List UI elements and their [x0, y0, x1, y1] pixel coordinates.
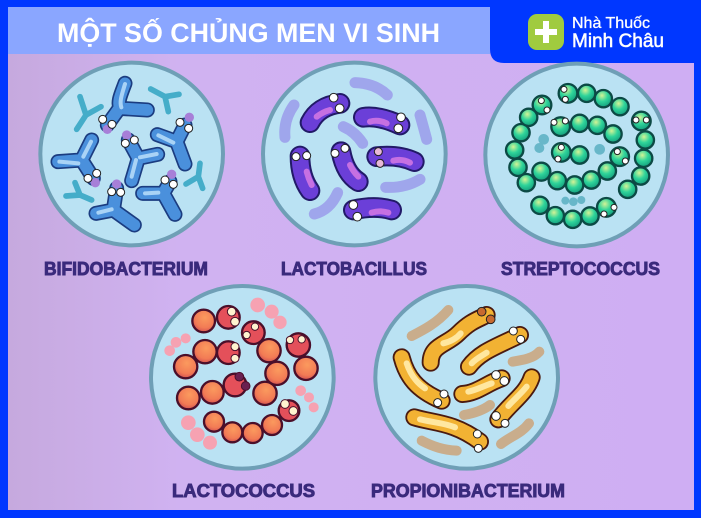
bacteria faces	[84, 113, 194, 196]
logo: Nhà Thuốc Minh Châu: Minh Châu	[572, 31, 664, 52]
panel: Bifidobacterium	[40, 63, 223, 279]
dish: yellow worm-shaped bacteria	[375, 286, 558, 469]
title banner	[8, 7, 490, 54]
label: BIFIDOBACTERIUM	[44, 259, 208, 279]
label: PROPIONIBACTERIUM	[371, 481, 565, 501]
label: LACTOBACILLUS	[281, 259, 427, 279]
icon: green cross	[528, 14, 564, 50]
chains	[506, 84, 654, 228]
dish: green bead chains	[485, 64, 668, 246]
panel: Propionibacterium	[371, 286, 565, 501]
chains	[174, 306, 318, 443]
title banner: MỘT SỐ CHỦNG MEN VI SINH	[57, 16, 440, 48]
panel: Streptococcus	[485, 64, 668, 279]
dish: rod-shaped purple bacteria	[263, 63, 446, 245]
label: LACTOCOCCUS	[172, 481, 315, 501]
dish: Y-shaped bacteria	[40, 63, 223, 245]
logo: Nhà Thuốc Minh Châu	[490, 0, 701, 63]
bacteria faces	[292, 93, 405, 221]
logo: Nhà Thuốc Minh Châu: Nhà Thuốc	[572, 15, 650, 32]
panel: Lactococcus	[151, 286, 334, 501]
label: STREPTOCOCCUS	[501, 259, 660, 279]
panel: Lactobacillus	[263, 63, 446, 279]
dish: red bead chains	[151, 286, 334, 469]
bead faces	[227, 307, 305, 415]
bead faces	[538, 86, 649, 217]
worm faces	[434, 307, 525, 452]
